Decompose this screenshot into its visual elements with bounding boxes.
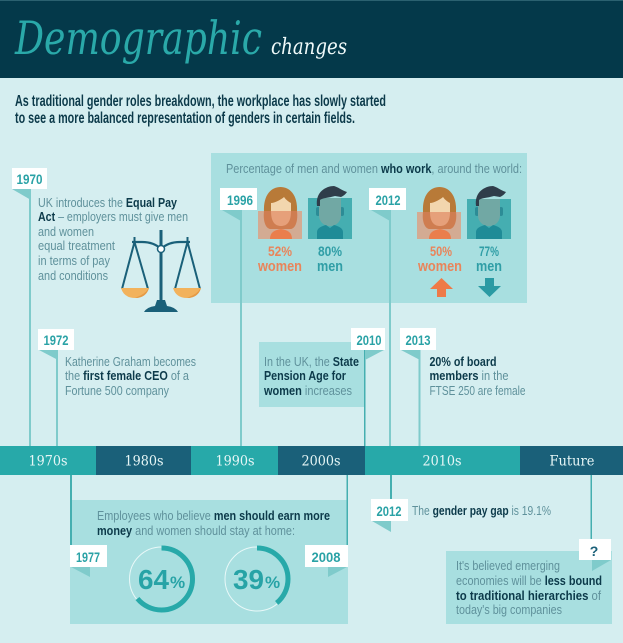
text: future: economies will be less bound — [456, 573, 602, 588]
panel: state pension — [259, 342, 364, 407]
flag 2012 lower: 2012 — [376, 503, 402, 519]
donut: 39%: 39 — [233, 564, 264, 595]
title: Demographic — [14, 11, 262, 65]
flag 1996 — [220, 188, 257, 221]
timeline connector lines — [29, 188, 592, 567]
text: gender pay gap: The gender pay gap is 19.1% — [412, 503, 551, 518]
icon: woman 2012 — [417, 187, 461, 239]
flag 2010: 2010 — [356, 332, 382, 348]
timeline bar: Future — [550, 454, 595, 470]
flag 2008 — [305, 545, 348, 577]
donut: 64%: % — [170, 573, 185, 592]
stat: 77% men — [476, 243, 502, 275]
text: equal pay act — [38, 195, 188, 283]
text: state pension age: In the UK, the State — [264, 354, 359, 369]
text: state pension age — [263, 354, 359, 398]
flag 2010 — [351, 328, 385, 360]
flag future — [579, 539, 611, 571]
text: employee belief: money and women should stay at home: — [97, 523, 295, 538]
text: board members: members in the — [430, 368, 508, 383]
flag 2012 top — [369, 188, 406, 221]
stat: 80% men — [317, 243, 343, 275]
stat: 80% men: 80% — [318, 243, 342, 259]
flag 1996: 1996 — [227, 192, 253, 208]
panel: men and women who work — [211, 153, 527, 303]
text: employee belief — [97, 508, 330, 538]
icon: man 1996 — [308, 186, 352, 239]
text: board members: 20% of board — [430, 354, 497, 369]
panel: employees' beliefs — [70, 500, 348, 624]
text: first female CEO: Fortune 500 company — [65, 383, 169, 398]
panel: future — [446, 551, 612, 624]
flag 1977: 1977 — [76, 549, 100, 565]
text: equal pay act: in terms of pay — [38, 253, 110, 268]
text: state pension age: Pension Age for — [264, 368, 346, 383]
flag 2012 lower — [371, 499, 408, 532]
intro text: As traditional gender roles breakdown, the workplace has slowly started — [15, 93, 386, 110]
flag 1977 — [70, 545, 107, 577]
stat: 50% women: women — [417, 258, 462, 275]
icon: man 2012 — [467, 186, 511, 239]
intro text: to see a more balanced representation of genders in certain fields. — [15, 110, 355, 127]
text: first female CEO — [65, 354, 196, 398]
stat: 80% men: men — [317, 258, 343, 275]
flag 1970 — [12, 168, 47, 200]
stat: 77% men: 77% — [479, 243, 499, 259]
text: equal pay act: equal treatment — [38, 238, 115, 253]
text: first female CEO: the first female CEO of a — [65, 368, 190, 383]
text: board members — [430, 354, 526, 398]
icon: scales — [121, 230, 201, 312]
text: future: to traditional hierarchies of — [456, 588, 601, 603]
arrow: down — [478, 278, 501, 297]
flag 1972: 1972 — [44, 332, 69, 348]
timeline bar: 1980s — [124, 454, 164, 470]
donut: 39% — [225, 547, 289, 611]
header band — [0, 0, 623, 78]
donut: 64% — [130, 547, 194, 611]
icon: woman 1996 — [258, 187, 302, 239]
text: equal pay act: Act – employers must give men — [38, 209, 188, 224]
text: equal pay act: and conditions — [38, 268, 108, 283]
flag 2008: 2008 — [312, 549, 341, 565]
timeline bar: 1970s — [28, 454, 68, 470]
flag 2013: 2013 — [406, 332, 431, 348]
text: future: It's believed emerging — [456, 558, 560, 573]
stat: 52% women: 52% — [268, 243, 292, 259]
donut: 39%: % — [265, 573, 280, 592]
stat: 77% men: men — [476, 258, 502, 275]
flag 2013 — [400, 328, 436, 360]
text: state pension age: women increases — [263, 383, 352, 398]
arrow: up — [430, 278, 453, 297]
timeline bar: 2000s — [302, 454, 341, 470]
text: future: today's big companies — [456, 602, 562, 617]
text: employee belief: Employees who believe men should earn more — [97, 508, 330, 523]
stat: 52% women — [257, 243, 302, 275]
flag 1972 — [38, 329, 74, 360]
stat: 50% women: 50% — [430, 243, 452, 259]
subtitle: changes — [271, 35, 347, 60]
intro text — [15, 93, 386, 127]
text: equal pay act: UK introduces the Equal Pay — [38, 195, 178, 210]
timeline bar — [0, 446, 623, 475]
flag 1970: 1970 — [16, 171, 43, 187]
text: board members: FTSE 250 are female — [430, 383, 526, 398]
flag future: ? — [590, 543, 598, 559]
text: first female CEO: Katherine Graham becomes — [65, 354, 196, 369]
stat: 50% women — [417, 243, 462, 275]
timeline bar: 1990s — [216, 454, 255, 470]
stat: 52% women: women — [257, 258, 302, 275]
donut: 64%: 64 — [138, 564, 169, 595]
flag 2012 top: 2012 — [376, 192, 401, 208]
text: equal pay act: and women — [38, 224, 94, 239]
panel heading: percentage who work: Percentage of men and women who work, around the world: — [226, 161, 522, 176]
timeline bar: 2010s — [422, 454, 462, 470]
text: future — [456, 558, 602, 617]
